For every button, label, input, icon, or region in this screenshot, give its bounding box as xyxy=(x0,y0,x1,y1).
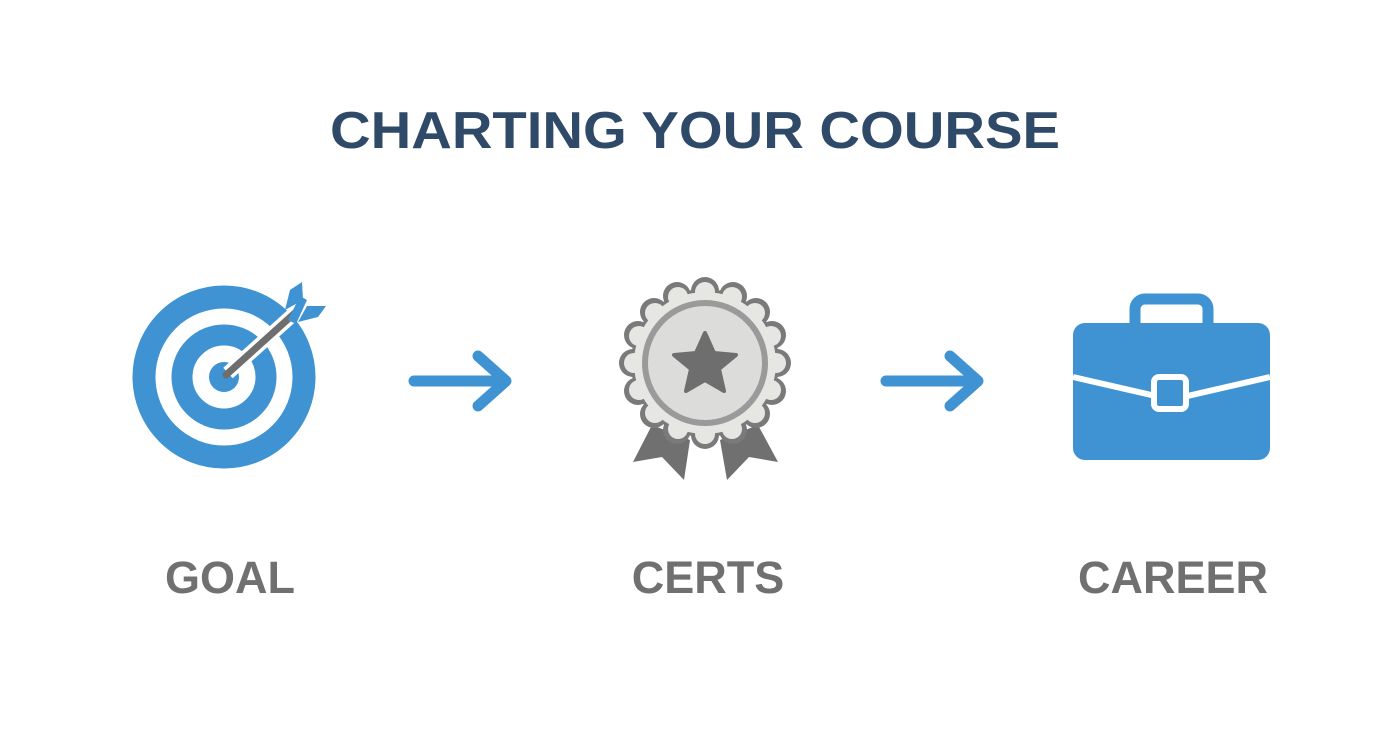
label: goal: GOAL xyxy=(165,552,295,603)
arrow 1 xyxy=(414,356,506,406)
label: certs: CERTS xyxy=(632,552,784,603)
icon: target xyxy=(144,282,326,457)
title: CHARTING YOUR COURSE xyxy=(330,102,1060,160)
icon: certificate medal xyxy=(619,277,791,480)
label: career: CAREER xyxy=(1078,552,1268,603)
arrow 2 xyxy=(886,356,978,406)
icon: briefcase xyxy=(1073,299,1270,460)
star xyxy=(674,333,736,391)
ribbons xyxy=(633,425,778,480)
